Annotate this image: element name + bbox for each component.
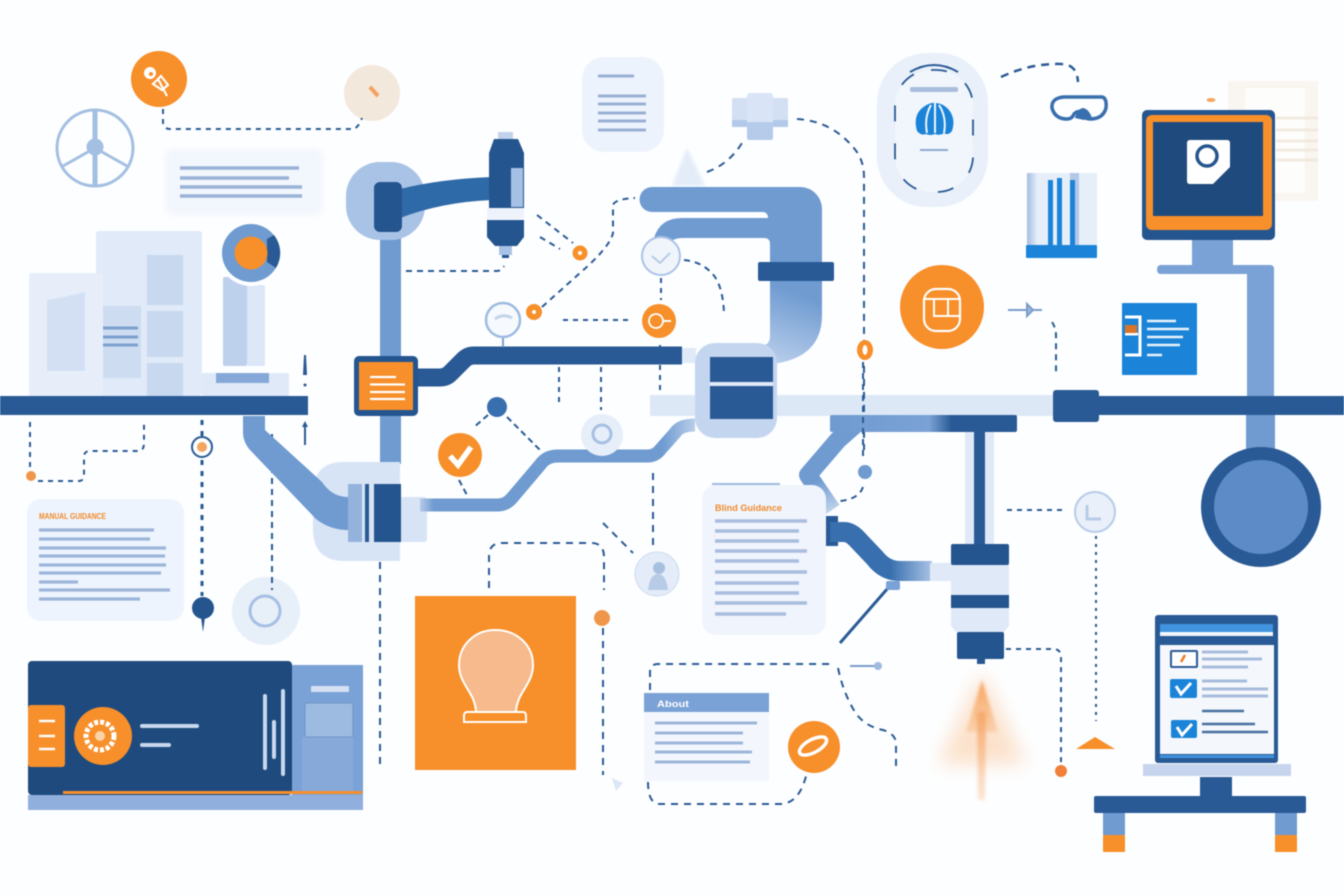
text panel: center article: [702, 484, 826, 635]
connector: central dashed loop: [380, 473, 896, 804]
icon: pale check circle: [559, 237, 724, 410]
pipe: lower navy to nozzle: [826, 516, 932, 571]
orange oval dot: [857, 340, 873, 360]
icon: peace wheel: [57, 110, 133, 186]
connector: top left dashed: [163, 109, 362, 129]
pipe: upper navy: [418, 356, 682, 378]
icon: pale circle right: [1007, 492, 1115, 721]
icon: peach circle: [344, 65, 400, 121]
icon: check circle: [438, 433, 482, 477]
connector: nozzle to dot: [1006, 649, 1067, 777]
icon: donut chart on pedestal: [218, 220, 284, 366]
text panel: lower center card: [644, 693, 769, 781]
monitor stand: [1157, 238, 1275, 462]
orange icon circle: [900, 265, 984, 349]
icon: orange wrench circle: [131, 51, 187, 107]
icon: magnifier circle: [486, 303, 520, 347]
icon: pale circle target: [232, 434, 300, 645]
arrow: right small: [850, 662, 882, 670]
dashboard panel: [28, 661, 363, 810]
icon: orange gear circle: [563, 304, 676, 338]
lower left mixer: [243, 416, 427, 561]
icon: person circle: [635, 552, 679, 596]
connector block on right bar: [1053, 390, 1099, 422]
conveyor: center pale bar: [650, 395, 1060, 416]
arrow: orange flame: [938, 672, 1026, 800]
background paper behind monitor: [1228, 81, 1318, 201]
orange square with bulb: [415, 596, 576, 770]
valve block: [695, 343, 777, 438]
pipe: middle blue: [420, 425, 695, 505]
pipe: top connector block: [707, 93, 864, 450]
small triangle marker: [612, 778, 623, 791]
text panel: left article: [27, 499, 184, 621]
conveyor: right bar: [1095, 396, 1344, 415]
line: diagonal to pipe: [840, 581, 900, 643]
dashed lines: near nozzle: [406, 198, 635, 307]
icon: capsule with shell: [877, 53, 988, 207]
dots: orange connectors: [526, 246, 588, 320]
desk: [1094, 764, 1306, 852]
connector: left dashed to dot: [30, 422, 144, 481]
small vertical arrows: [302, 355, 308, 445]
icon: orange triangle: [1076, 737, 1115, 749]
icon: book with blue bars: [1026, 173, 1097, 258]
monitor: [1142, 110, 1275, 240]
text panel: top left: [165, 149, 323, 215]
icon: pale ring: [581, 414, 623, 456]
connector with arrow: [1008, 304, 1056, 374]
icon: orange ring circle: [788, 721, 840, 773]
left machine: column and arm: [346, 132, 524, 464]
laptop screen: [1155, 615, 1278, 763]
connector: triangle network: [459, 415, 540, 497]
dot: speckled orange: [594, 610, 610, 626]
stub between pipe and valve: [682, 348, 696, 363]
conveyor: left bar: [0, 396, 308, 415]
orange note box: [354, 356, 418, 416]
big wheel: [1201, 447, 1321, 567]
blue card: [1122, 303, 1197, 375]
dashed circle connector: [840, 362, 872, 501]
text panel: center article: Blind Guidance: [715, 503, 782, 513]
building illustration: [29, 231, 289, 396]
dot: pendulum connector: [192, 420, 214, 632]
text panel: lower center card: About: [657, 699, 689, 709]
small orange mark: [1206, 98, 1216, 102]
text panel: top center: [582, 57, 664, 152]
dot: small orange: [26, 471, 36, 481]
dot: navy node: [487, 397, 507, 417]
connector & goggles icon: [1001, 64, 1106, 120]
right pipe assembly: [808, 415, 1017, 544]
lower machine elbow: [640, 148, 834, 364]
text panel: left article: MANUAL GUIDANCE: [39, 512, 107, 521]
vertical nozzle: [930, 544, 1009, 664]
